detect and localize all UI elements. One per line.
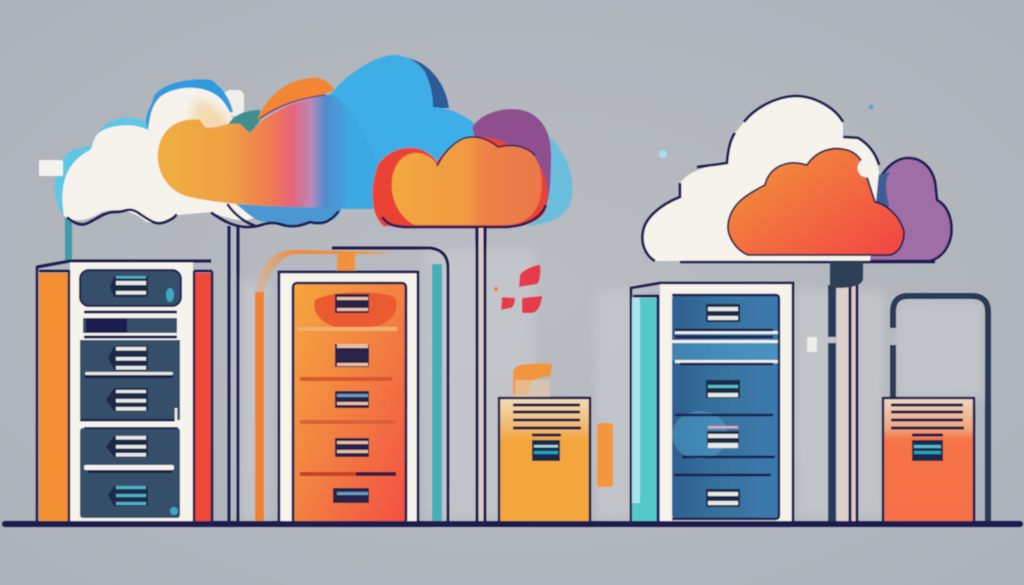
pole connector — [830, 262, 863, 288]
pole two — [477, 228, 485, 524]
red rear front cloud — [373, 137, 548, 227]
front cloud outline — [382, 205, 546, 227]
red fragments — [494, 265, 542, 313]
drawer handles — [333, 294, 369, 503]
blue outline of white cloud — [146, 80, 233, 130]
white blob on orange cloud — [858, 158, 876, 178]
drawers two and three — [80, 340, 180, 423]
vent lines — [513, 405, 581, 435]
server 3 — [631, 283, 793, 525]
teal side panel — [632, 296, 658, 523]
right red side — [195, 273, 211, 523]
white cloud outline — [642, 96, 935, 262]
peach fade on white cloud — [190, 100, 232, 135]
orange cloud — [728, 149, 904, 255]
cyan edges of white cloud — [55, 117, 150, 215]
cabinet body — [70, 260, 193, 525]
side outlines — [37, 266, 212, 522]
blue under cloud — [236, 204, 342, 226]
drawer one — [80, 270, 181, 306]
drawer handles — [106, 276, 148, 506]
drawer edge — [672, 295, 779, 519]
teal cloud piece — [227, 110, 262, 134]
box body — [883, 398, 974, 525]
top edge — [37, 261, 211, 267]
cabinet frame — [279, 272, 418, 524]
small box 1 — [499, 398, 590, 525]
cabinet outline — [631, 283, 793, 522]
orange block above box — [513, 364, 552, 395]
small white tab left — [39, 160, 63, 176]
drawer handles — [706, 304, 740, 507]
small white tag — [807, 337, 817, 352]
pole cluster — [832, 285, 857, 523]
orange drawer stack — [293, 283, 406, 524]
orange top connector — [255, 250, 400, 292]
poles and frames — [229, 226, 988, 524]
vent lines — [891, 405, 964, 435]
small box 2 — [883, 398, 974, 525]
dark blue patch — [868, 172, 890, 208]
drawer light panels — [672, 343, 779, 459]
orange bar — [255, 290, 264, 521]
red blob behind first handle — [314, 292, 396, 327]
status screen — [912, 440, 943, 461]
box body — [499, 398, 590, 525]
left orange side — [39, 273, 68, 523]
orange front cloud — [392, 138, 542, 225]
purple cloud — [472, 109, 551, 212]
large blue cloud — [300, 55, 500, 209]
ground line — [2, 521, 1023, 527]
dark separators — [674, 330, 775, 475]
orange top cloud — [258, 78, 335, 120]
status screen — [532, 440, 560, 461]
pale block above box — [515, 380, 550, 397]
pole one — [229, 226, 238, 522]
white cloud — [642, 96, 879, 262]
cloud underside outlines — [68, 95, 338, 227]
colourful middle cloud — [158, 95, 390, 209]
small white tab right — [224, 90, 244, 116]
blue cloud back shade — [407, 58, 449, 108]
purple cloud — [860, 158, 951, 261]
frame behind orange box — [893, 296, 988, 522]
drawer stack — [672, 295, 779, 519]
server 2 — [279, 272, 418, 524]
white cloud — [62, 88, 260, 223]
cabinet body — [660, 284, 793, 525]
orange side block — [597, 423, 613, 487]
separator band — [83, 312, 177, 337]
left cloud group — [39, 55, 573, 227]
drawers four and five — [80, 428, 180, 518]
server 1 — [37, 260, 212, 525]
cloud sparkle dots — [659, 104, 874, 158]
pale haze behind the machines — [240, 250, 985, 520]
teal bar — [432, 264, 442, 521]
light blue cloud edge — [500, 135, 573, 226]
teal strut under white cloud — [65, 218, 72, 262]
right cloud group — [642, 96, 951, 262]
frame behind server two — [332, 248, 448, 522]
white separators — [672, 331, 780, 363]
front cloud top line — [437, 137, 535, 166]
drawer shelves — [298, 327, 397, 476]
drawer highlights — [166, 288, 178, 515]
